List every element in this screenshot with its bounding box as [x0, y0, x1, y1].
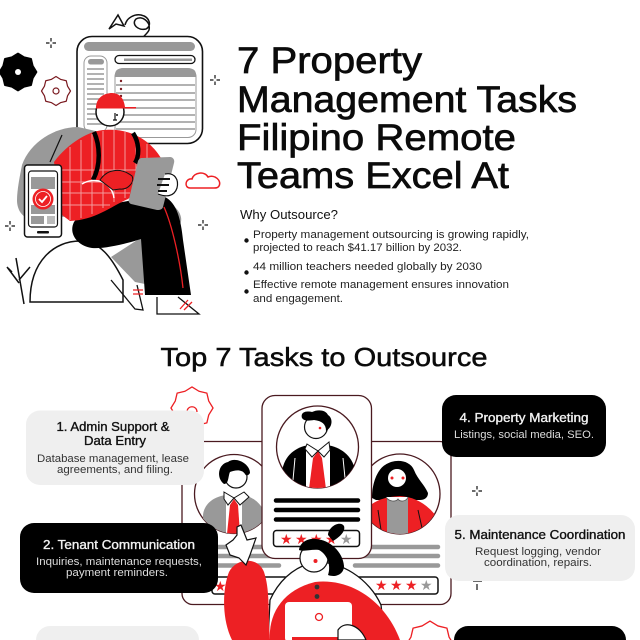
browser window	[77, 36, 202, 144]
title: Filipino Remote	[237, 116, 516, 158]
decorative red gear bottom	[406, 621, 454, 640]
bullet list: projected to reach $41.17 billion by 2032.	[253, 242, 462, 254]
card 4: property marketing: Listings, social media, SEO.	[454, 429, 594, 441]
title: Teams Excel At	[237, 154, 510, 196]
star rating: ★	[310, 531, 323, 547]
icon: red cloud	[186, 173, 220, 188]
grey lower leg behind	[111, 235, 150, 285]
right panel lines and stars: ★	[405, 577, 418, 593]
card 2: tenant communication	[20, 523, 218, 593]
decorative red gear top	[171, 387, 213, 429]
head and cap	[96, 93, 136, 126]
title: Management Tasks	[237, 78, 577, 120]
back panel	[182, 442, 451, 604]
card 4: property marketing: 4. Property Marketing	[460, 411, 589, 425]
section heading: Top 7 Tasks to Outsource	[160, 342, 488, 372]
white rock	[30, 241, 123, 302]
woman with pointing hand and tablet	[224, 524, 400, 640]
text block: why outsource	[240, 208, 529, 305]
backpack strap	[50, 135, 62, 162]
bullet list	[244, 229, 529, 305]
bullet list: Property management outsourcing is growing rapidly,	[253, 229, 529, 241]
right panel lines and stars: ★	[375, 577, 388, 593]
right profile portrait	[372, 453, 441, 535]
shoes	[111, 280, 199, 314]
bullet list: 44 million teachers needed globally by 2030	[253, 261, 482, 273]
card 1: admin support: agreements, and filing.	[57, 464, 173, 476]
icon: twig	[7, 258, 30, 304]
illustration: worker with phone and tablet	[0, 15, 220, 314]
illustration: candidate profile cards	[171, 387, 482, 640]
black trousers	[72, 197, 191, 295]
card 1: admin support: Data Entry	[84, 434, 147, 448]
right panel lines and stars	[350, 547, 438, 594]
card 1: admin support	[26, 410, 204, 485]
card 5: maintenance coordination: 5. Maintenance Coordination	[454, 528, 626, 542]
card 2: tenant communication: payment reminders.	[66, 567, 168, 579]
right panel lines and stars: ★	[390, 577, 403, 593]
left profile portrait	[194, 454, 262, 534]
icon: outline gear	[42, 76, 70, 106]
star rating: ★	[340, 531, 353, 547]
card 2: tenant communication: 2. Tenant Communication	[43, 538, 195, 552]
star rating: ★	[295, 531, 308, 547]
title: 7 Property	[237, 39, 422, 81]
subheading: Why Outsource?	[240, 208, 338, 222]
backpack grey shape	[17, 127, 100, 219]
bullet list: and engagement.	[253, 293, 343, 305]
bullet list: Effective remote management ensures innovation	[253, 279, 509, 291]
card 5: maintenance coordination	[445, 515, 635, 581]
icon: sparkles	[5, 38, 220, 231]
red plaid shirt	[54, 130, 161, 221]
card 1: admin support: Database management, lease	[37, 453, 189, 465]
centre profile card	[262, 396, 372, 558]
star rating: ★	[325, 531, 338, 547]
card 4: property marketing	[442, 395, 606, 457]
card 3: partly visible	[36, 626, 199, 640]
left panel lines and stars: ★	[214, 578, 227, 594]
card 1: admin support: 1. Admin Support &	[56, 420, 170, 434]
left panel lines and stars	[212, 547, 288, 594]
tablet	[129, 157, 178, 210]
phone	[24, 165, 62, 237]
icon: paper plane with loop	[109, 15, 149, 44]
star rating: ★	[280, 531, 293, 547]
portrait	[276, 406, 358, 490]
card 5: maintenance coordination: coordination, repairs.	[484, 557, 592, 569]
card 5: maintenance coordination: Request logging, vendor	[475, 546, 601, 558]
title	[237, 39, 577, 196]
text lines	[276, 500, 358, 520]
icon: black gear	[0, 54, 36, 90]
card 2: tenant communication: Inquiries, maintenance requests,	[36, 556, 202, 568]
right panel lines and stars: ★	[420, 577, 433, 593]
icon: sparkles right	[472, 486, 482, 590]
star rating	[274, 530, 360, 547]
card 6: partly visible	[454, 626, 626, 640]
